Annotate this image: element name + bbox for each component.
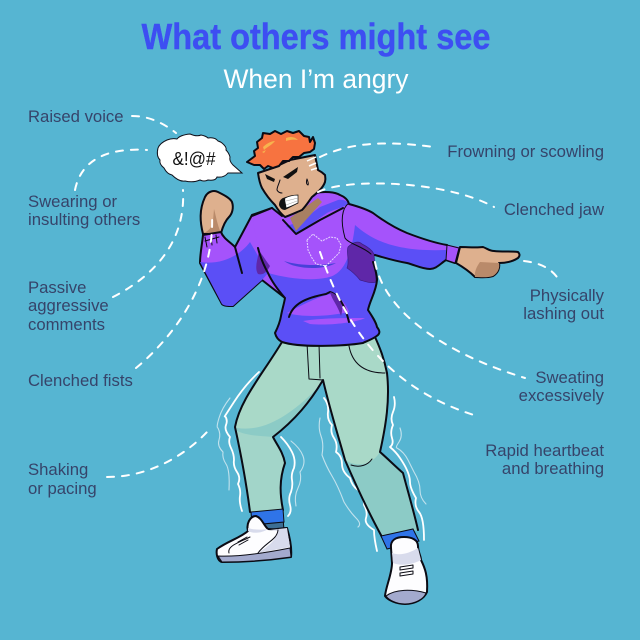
label: raised voice: Raised voice [28,107,124,126]
cuffs [251,509,419,549]
hand shadow [475,262,499,277]
right shoe [385,537,427,604]
label: swearing: Swearing or [28,192,117,211]
label: lashing out: lashing out [523,304,604,323]
hair [247,131,315,169]
face [258,155,325,217]
label: clenched jaw [318,183,605,219]
sweat patches [347,242,376,283]
figure: angry person [200,131,520,604]
pants [235,337,418,537]
label: shaking: or pacing [28,479,97,498]
label: sweating: Sweating [535,368,604,387]
label: sweating: excessively [519,386,605,405]
label: heartbeat: and breathing [502,459,604,478]
hoodie body [252,192,460,346]
label: frowning: Frowning or scowling [447,142,604,161]
label: passive aggressive: comments [28,315,105,334]
collar line [283,208,343,234]
label: shaking: Shaking [28,460,88,479]
right hand [456,247,520,277]
label: passive aggressive: Passive [28,278,86,297]
label: lashing out [523,261,605,323]
title: What others might see [142,16,490,57]
label: heartbeat [320,252,604,478]
left sock [262,518,284,532]
neck [290,198,322,231]
speech bubble: &!@# [172,149,216,169]
label: swearing [28,150,147,229]
right cuff [446,245,459,263]
heart outline [307,234,341,266]
label: clenched fists: Clenched fists [28,371,133,390]
label: lashing out: Physically [530,286,605,305]
label: passive aggressive: aggressive [28,296,109,315]
label: raised voice [28,107,176,133]
pocket [289,292,349,322]
label: heartbeat: Rapid heartbeat [485,441,604,460]
label: sweating [375,262,605,405]
left arm and fist [200,191,285,306]
left shoe [217,516,291,562]
shaking lines [217,372,426,551]
label: passive aggressive [28,190,183,334]
speech bubble [157,134,242,182]
label: shaking [28,432,207,498]
label: swearing: insulting others [28,210,140,229]
label: clenched jaw: Clenched jaw [504,200,605,219]
label: frowning [320,142,604,161]
label: clenched fists [28,215,212,390]
subtitle: When I’m angry [224,64,409,94]
